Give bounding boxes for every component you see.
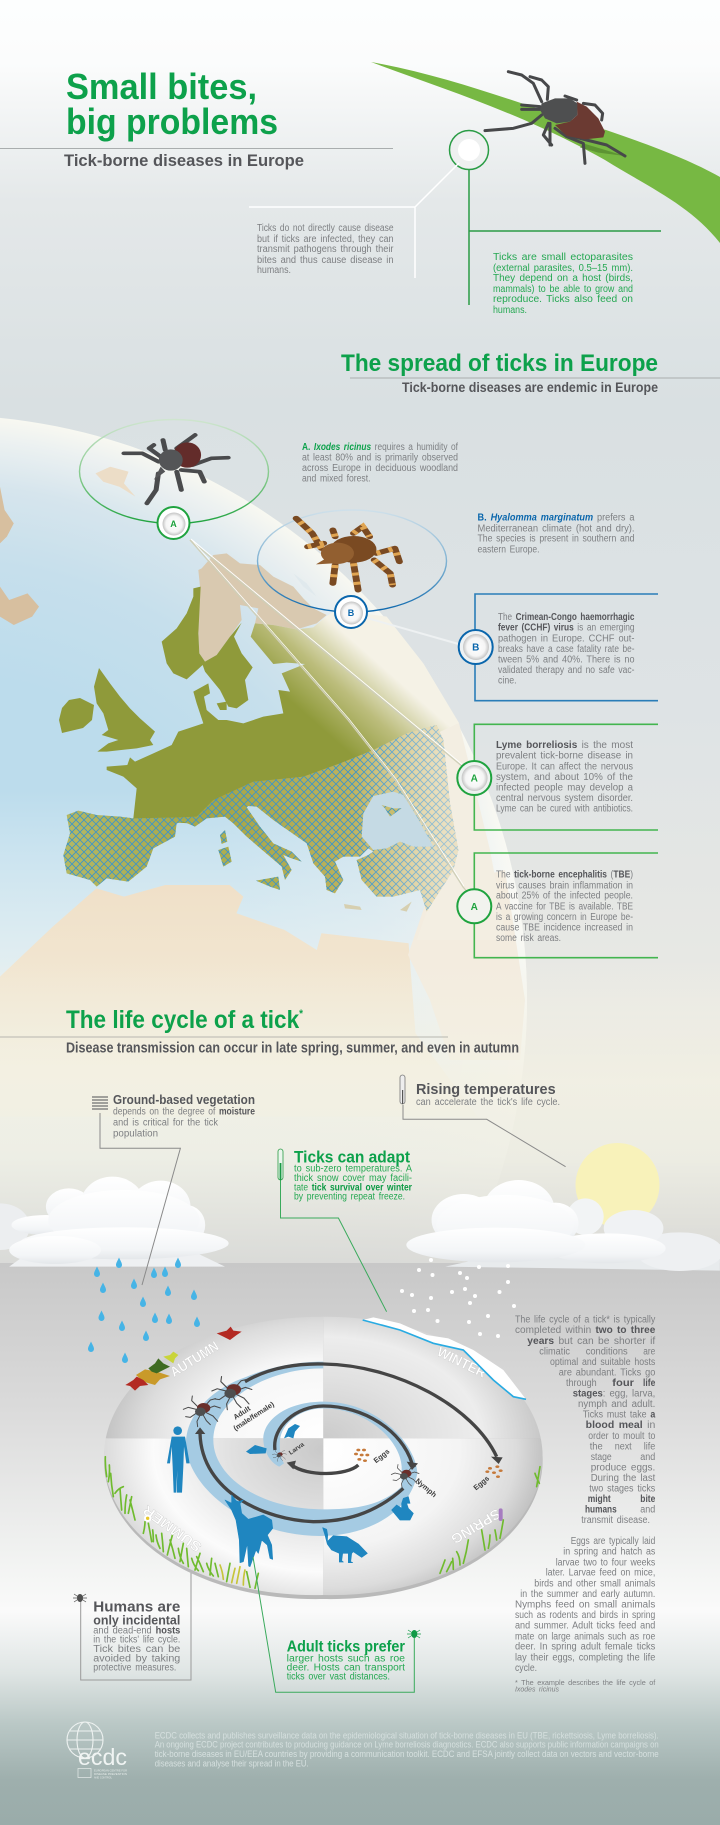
text: life cycle paragraph two: larvae two to four weeks: [556, 1557, 655, 1568]
text: ticks do not cause disease: but if ticks are infected, they can: [257, 234, 394, 245]
grass blade: [371, 62, 720, 243]
panel: ticks can adapt: thick snow cover may facili-: [294, 1173, 412, 1184]
panel: CCHF: pathogen in Europe. CCHF out-: [498, 633, 634, 644]
map: northern Scandinavia (no ticks): [198, 553, 327, 662]
text: life cycle paragraph one: two stages ticks: [589, 1484, 655, 1494]
text: life cycle paragraph one: and: [640, 1505, 655, 1516]
map: small eastern islands: [344, 902, 412, 912]
panel: ticks can adapt: by preventing repeat freeze.: [294, 1192, 405, 1203]
icon: ECDC logo: EUROPEAN CENTRE FOR: [94, 1768, 128, 1772]
text: life cycle paragraph two: mate on large animals such as roe: [515, 1631, 656, 1642]
panel: tick-borne encephalitis: about 25% of the infected people.: [496, 891, 633, 902]
grass: [105, 1457, 540, 1588]
text: life cycle paragraph two: Nymphs feed on small animals: [515, 1600, 655, 1611]
panel: CCHF: validated therapy and no safe vac-: [498, 665, 634, 676]
text: life cycle paragraph one: Ticks must take a: [583, 1410, 656, 1421]
panel: adult ticks prefer: [253, 1557, 421, 1692]
node B: B: [348, 608, 355, 618]
text: life cycle paragraph one: climatic: [539, 1346, 570, 1357]
icons: egg clusters: [354, 1449, 503, 1478]
text: life cycle paragraph one: four: [612, 1378, 634, 1389]
panel: Lyme borreliosis: [457, 724, 658, 830]
map: UK, Ireland and islands: [59, 668, 227, 752]
text: ticks do not cause disease: humans.: [257, 265, 291, 276]
text: life cycle paragraph one: are abundant. Ticks go: [559, 1368, 656, 1378]
panel: ground-based vegetation: and is critical for the tick: [113, 1118, 219, 1129]
panel: humans are incidental: Tick bites can be: [93, 1644, 181, 1655]
text: life cycle paragraph one: nymph and adult.: [578, 1399, 655, 1410]
snow flakes: [400, 1258, 516, 1338]
text: life cycle paragraph one: might: [588, 1494, 611, 1505]
season labels: SUMMER: [140, 1502, 204, 1556]
subtitle: Tick-borne diseases in Europe: [64, 151, 304, 170]
panel: CCHF: The Crimean-Congo haemorrhagic: [498, 612, 635, 623]
text: footer: [155, 1730, 659, 1769]
subheading: disease transmission: Disease transmission can occur in late spring, summer, and even in autumn: [66, 1041, 519, 1057]
panel: rising temperatures: Rising temperatures: [416, 1081, 556, 1098]
title: big problems: [66, 101, 278, 142]
text: ticks do not cause disease: [257, 223, 394, 276]
disc labels: Eggs: [471, 1474, 491, 1492]
map: central and eastern Europe: [107, 610, 459, 823]
disc labels: Nymph: [414, 1476, 439, 1499]
text: Hyalomma marginatum: Mediterranean climate (hot and dry).: [478, 523, 634, 534]
panel: Lyme borreliosis: system, and about 10% of the: [496, 772, 633, 783]
background: sky: [0, 0, 720, 1263]
icon: ECDC logo: [67, 1722, 128, 1780]
panel: ground-based vegetation: [92, 1093, 255, 1285]
season labels: SPRING: [448, 1506, 503, 1548]
node B: [335, 596, 367, 628]
panel: ground-based vegetation: depends on the degree of moisture: [113, 1107, 255, 1118]
text: life cycle paragraph one: [515, 1315, 656, 1526]
text: life cycle paragraph one: through: [566, 1378, 597, 1389]
text: life cycle paragraph one: next: [615, 1441, 632, 1452]
subheading: endemic: Tick-borne diseases are endemic in Europe: [402, 379, 658, 395]
text: life cycle paragraph two: in the summer and early autumn.: [520, 1589, 655, 1600]
text: footer: diseases and analyse their spread in the EU.: [155, 1758, 309, 1769]
text: ticks do not cause disease: Ticks do not directly cause disease: [257, 223, 394, 234]
text: ticks are ectoparasites: Ticks are small ectoparasites: [493, 252, 633, 263]
panel: humans are incidental: Humans are: [93, 1599, 180, 1616]
text: life cycle paragraph one: years but can be shorter if: [527, 1336, 656, 1347]
text: life cycle paragraph one: stage: [591, 1452, 612, 1463]
map: Europe: [59, 553, 507, 940]
autumn leaves: [125, 1327, 242, 1391]
icon: Ixodes tick: [124, 435, 228, 503]
panel: tick-borne encephalitis: [457, 853, 658, 958]
spiral band: [186, 1362, 417, 1536]
ellipse B: [258, 510, 446, 612]
text: life cycle paragraph one: During the last: [591, 1473, 656, 1484]
text: Ixodes ricinus: and mixed forest.: [302, 474, 370, 485]
panel: ticks can adapt: tate tick survival over winter: [294, 1182, 412, 1193]
text: life cycle paragraph one: humans: [585, 1505, 617, 1516]
panel: tick-borne encephalitis: The tick-borne encephalitis (TBE): [496, 870, 633, 881]
text: life cycle paragraph one: transmit disease.: [581, 1515, 650, 1526]
title: Small bites,: [66, 66, 257, 107]
disc labels: [226, 1391, 491, 1499]
panel: humans are incidental: in the ticks' life cycle.: [93, 1635, 180, 1646]
text: ticks do not cause disease: transmit pathogens through their: [257, 244, 394, 255]
panel: tick-borne encephalitis: some risk areas.: [496, 933, 561, 944]
panel: ground-based vegetation: population: [113, 1129, 158, 1140]
text: life cycle paragraph two: Eggs are typically laid: [571, 1536, 655, 1547]
cloud right: [406, 1180, 720, 1271]
text: ticks are ectoparasites: mammals) to be able to grow and: [493, 284, 633, 295]
cloud left: [0, 1177, 229, 1267]
text: life cycle paragraph two: in spring and hatch as: [563, 1547, 655, 1558]
text: ticks do not cause disease: bites and thus cause disease in: [257, 255, 394, 266]
panel: ticks can adapt: Ticks can adapt: [294, 1148, 410, 1167]
text: life cycle paragraph two: birds and other small animals: [534, 1578, 655, 1589]
text: Hyalomma marginatum: The species is present in southern and: [478, 534, 634, 545]
panel: Lyme borreliosis: central nervous system disorder.: [496, 793, 633, 804]
text: life cycle paragraph one: completed within two to three: [515, 1325, 656, 1336]
panel: tick-borne encephalitis: A vaccine for TBE is available. TBE: [496, 901, 633, 912]
panel: humans are incidental: [73, 1594, 181, 1673]
icon: Hyalomma tick: [296, 518, 399, 590]
panel: CCHF: cine.: [498, 675, 516, 686]
panel: Lyme borreliosis: infected people may develop a: [496, 782, 633, 793]
text: life cycle paragraph one: life: [644, 1441, 656, 1452]
panel: ticks can adapt: [278, 1148, 412, 1312]
panel: CCHF: [459, 594, 658, 701]
text: Hyalomma marginatum: B. Hyalomma marginatum prefers a: [478, 513, 635, 524]
text: life cycle paragraph two: later. Larvae feed on mice,: [546, 1568, 655, 1579]
panel: CCHF: tween 5% and 40%. There is no: [498, 654, 635, 665]
map: Norway and Sweden: [162, 587, 253, 708]
panel: adult ticks prefer: larger hosts such as roe: [287, 1653, 405, 1664]
text: Ixodes ricinus: at least 80% and is primarily observed: [302, 453, 458, 464]
panel: CCHF: fever (CCHF) virus is an emerging: [498, 623, 634, 634]
text: life cycle paragraph two: [515, 1536, 656, 1674]
disc labels: Larva: [288, 1441, 306, 1457]
season labels: WINTER: [435, 1343, 489, 1381]
text: life cycle paragraph one: produce eggs.: [591, 1462, 655, 1473]
node A: [158, 507, 190, 539]
magnifier circle: [450, 130, 488, 170]
footnote: * The example describes the life cycle of: [515, 1678, 656, 1687]
map: Arabia: [408, 870, 525, 1060]
map: tick-infested southern Europe with net: [63, 725, 458, 912]
text: life cycle paragraph one: blood meal in: [586, 1420, 655, 1431]
green callout lines: [469, 169, 661, 305]
title: [66, 66, 278, 142]
flowers: [144, 1508, 503, 1522]
icon: ECDC logo: ecdc: [78, 1744, 127, 1770]
footnote: [515, 1678, 656, 1694]
heading: the spread of ticks: The spread of ticks in Europe: [341, 350, 658, 377]
text: ticks are ectoparasites: [493, 252, 633, 316]
text: Hyalomma marginatum: eastern Europe.: [478, 544, 540, 555]
panel: rising temperatures: can accelerate the tick's life cycle.: [416, 1097, 560, 1108]
text: life cycle paragraph two: lay their eggs, completing the life: [515, 1652, 656, 1663]
connector lines from node A: [190, 539, 470, 895]
panel: humans callout frame: [81, 1498, 191, 1680]
arrows: [200, 1364, 497, 1522]
text: life cycle paragraph one: stages: egg, larva,: [573, 1389, 655, 1400]
text: life cycle paragraph one: conditions: [586, 1346, 628, 1357]
panel: ticks can adapt: to sub-zero temperatures. A: [294, 1164, 412, 1175]
connector B: [367, 618, 462, 645]
ellipse A: [80, 420, 268, 524]
text: life cycle paragraph one: order to moult to: [588, 1431, 656, 1442]
panel: adult ticks prefer: deer. Hosts can transport: [287, 1662, 405, 1673]
icon: tick on grass blade: [485, 72, 625, 163]
panel: humans are incidental: only incidental: [93, 1612, 180, 1627]
text: life cycle paragraph one: life: [643, 1378, 656, 1389]
text: life cycle paragraph two: cycle.: [515, 1663, 537, 1674]
panel: CCHF: breaks have a case fatality rate be-: [498, 644, 634, 655]
panel: CCHF: B: [472, 642, 479, 654]
text: life cycle paragraph one: optimal and suitable hosts: [550, 1357, 655, 1368]
ground: [0, 1263, 720, 1825]
chart: seasonal life cycle disc: [100, 1313, 547, 1602]
text: ticks are ectoparasites: They depend on a host (birds,: [493, 273, 633, 284]
map: Black Sea: [362, 792, 433, 850]
text: life cycle paragraph one: are: [643, 1346, 656, 1357]
text: Hyalomma marginatum: [478, 513, 635, 555]
panel: humans are incidental: and dead-end hosts: [93, 1625, 181, 1636]
text: Ixodes ricinus: [302, 442, 458, 485]
panel: tick-borne encephalitis: is a growing concern in Europe be-: [496, 912, 633, 923]
text: ticks are ectoparasites: (external parasites, 0.5–15 mm).: [493, 263, 633, 274]
icons: ticks on the disc: [183, 1376, 419, 1487]
text: ticks are ectoparasites: humans.: [493, 305, 527, 316]
cream fade at the bottom of the globe: [0, 960, 720, 1263]
map: Crimea: [382, 805, 402, 817]
text: Ixodes ricinus: A. Ixodes ricinus requires a humidity of: [302, 442, 458, 453]
map: Africa, Iceland and northern lands: [0, 467, 477, 1117]
season labels: [140, 1338, 503, 1556]
text: life cycle paragraph two: such as rodents and birds in spring: [515, 1610, 655, 1621]
text: life cycle paragraph two: and summer. Adult ticks feed and: [515, 1621, 655, 1632]
panel: adult ticks prefer: Adult ticks prefer: [287, 1639, 405, 1656]
heading: the life cycle: *: [299, 1008, 304, 1020]
text: Ixodes ricinus: across Europe in deciduous woodland: [302, 463, 458, 474]
text: life cycle paragraph one: The life cycle of a tick* is typically: [515, 1315, 655, 1326]
sun: [576, 1143, 660, 1227]
disc labels: Adult: [232, 1403, 253, 1422]
node A: A: [170, 519, 177, 529]
panel: globe with map of Europe: [0, 415, 527, 1585]
panel: Lyme borreliosis: Europe. It can affect the nervous: [496, 761, 633, 772]
disc labels: Eggs: [372, 1447, 391, 1465]
icon: ECDC logo: AND CONTROL: [94, 1776, 112, 1780]
icons: host animals: [167, 1424, 413, 1567]
season labels: AUTUMN: [167, 1338, 221, 1380]
icon: ECDC logo: DISEASE PREVENTION: [94, 1772, 127, 1776]
snow edge: [363, 1317, 526, 1399]
text: life cycle paragraph one: and: [640, 1452, 655, 1463]
footnote: Ixodes ricinus: [515, 1685, 559, 1694]
text: life cycle paragraph one: the: [590, 1441, 603, 1452]
panel: humans are incidental: avoided by taking: [93, 1653, 180, 1664]
map: pale Arctic islands: [293, 573, 317, 620]
text: life cycle paragraph one: bite: [640, 1494, 656, 1505]
panel: Lyme borreliosis: prevalent tick-borne disease in: [496, 751, 633, 762]
map: eastern land beyond the net: [417, 723, 507, 940]
text: ticks are ectoparasites: reproduce. Ticks also feed on: [493, 294, 633, 305]
panel: tick-borne encephalitis: A: [471, 902, 478, 913]
panel: tick-borne encephalitis: cause TBE incidence increased in: [496, 923, 633, 934]
white callout lines: [249, 163, 459, 278]
panel: Lyme borreliosis: Lyme can be cured with antibiotics.: [496, 804, 633, 815]
panel: Lyme borreliosis: A: [471, 774, 478, 784]
panel: rising temperatures: [400, 1075, 566, 1167]
panel: tick-borne encephalitis: virus causes brain inflammation in: [496, 880, 633, 891]
panel: ground-based vegetation: Ground-based vegetation: [113, 1093, 255, 1107]
panel: Lyme borreliosis: Lyme borreliosis is the most: [496, 740, 633, 751]
rain drops: [88, 1258, 200, 1363]
heading: the life cycle: The life cycle of a tick: [66, 1006, 324, 1034]
panel: humans are incidental: protective measures.: [93, 1662, 176, 1673]
disc labels: (male/female): [232, 1399, 276, 1433]
text: life cycle paragraph two: deer. In spring adult female ticks: [515, 1642, 655, 1653]
panel: adult ticks prefer: ticks over vast distances.: [287, 1671, 390, 1682]
